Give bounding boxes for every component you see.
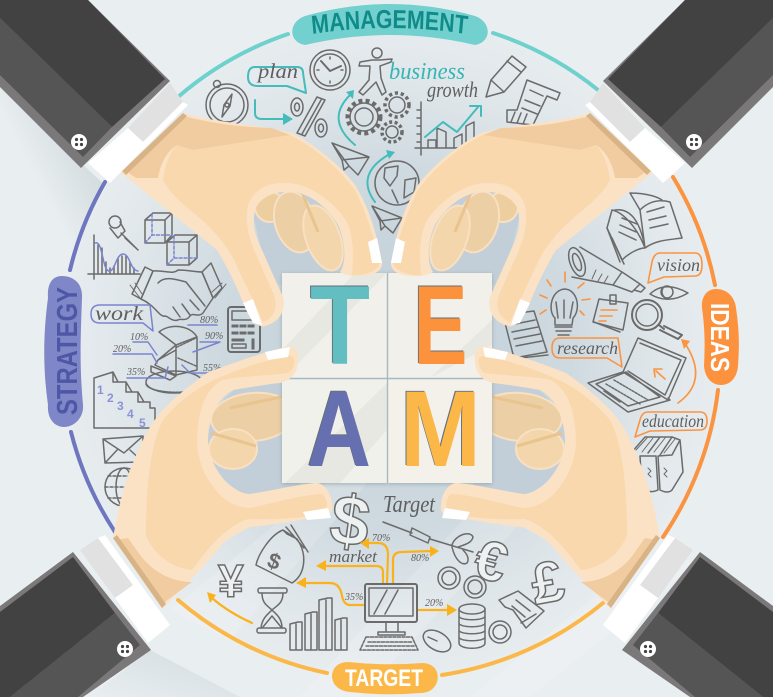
sleeve: top left: [0, 0, 188, 183]
icon: stairs: [94, 372, 155, 430]
letter: M: M: [400, 368, 481, 489]
icon: stairs: 2: [107, 391, 114, 405]
labels: target percentages: market: [329, 547, 378, 566]
hand: top left: [120, 113, 382, 326]
sleeve: top right: [585, 0, 773, 183]
tile: T: [282, 273, 387, 378]
icon: yen: ¥: [218, 555, 244, 607]
pill: management: [292, 4, 488, 45]
icon: pushpin: [109, 216, 138, 250]
text: business: business: [389, 59, 465, 85]
labels: target percentages: 35%: [344, 592, 363, 603]
icon: open book: [607, 193, 682, 264]
text: growth: growth: [427, 77, 478, 102]
arrow: laptop: [678, 339, 696, 403]
arc: ideas top: [673, 177, 715, 285]
icon: eye: [650, 286, 688, 299]
sleeve: bottom left: [0, 535, 170, 697]
pill: strategy: [44, 276, 84, 427]
arc: target left: [178, 600, 327, 673]
icon: note: [593, 295, 628, 332]
bubble: plan: plan: [256, 59, 298, 83]
arc: ideas bottom: [663, 390, 718, 537]
icon: light bulb: [540, 272, 590, 335]
bubble: work: [91, 303, 153, 331]
icon: globe grid: [105, 468, 143, 506]
icon: dart: [383, 522, 473, 564]
labels: target percentages: 70%: [372, 533, 390, 544]
icon: books: [632, 437, 683, 492]
labels: target percentages: 80%: [411, 553, 429, 564]
labels: target percentages: [329, 533, 443, 609]
icon: paper plane: [332, 143, 369, 175]
bubble: vision: vision: [657, 255, 700, 275]
bubble: work: work: [95, 303, 144, 325]
chart: 3d pie: [146, 326, 202, 393]
arc: management right: [493, 33, 598, 90]
callouts: pie percentages: 35%: [126, 367, 145, 378]
icon: money bag: [256, 525, 308, 583]
callouts: pie percentages: 10%: [130, 332, 148, 343]
card: team: [282, 273, 492, 483]
icon: magnifier: [632, 300, 682, 339]
label: management: MANAGEMENT: [312, 10, 468, 34]
label: strategy: STRATEGY: [52, 287, 84, 415]
icon: calculator: [228, 307, 260, 352]
icon: compass: [206, 80, 248, 126]
arrow: globe: [367, 150, 395, 202]
label: ideas: IDEAS: [705, 303, 735, 372]
icon: clock: [310, 50, 350, 90]
disk light streaks: [170, 480, 700, 697]
tile: M: [388, 379, 492, 483]
icons: ideas: [503, 193, 707, 492]
fingers behind card: top left: [253, 187, 352, 285]
bubble: plan: [248, 59, 306, 93]
arrow: plan: [255, 100, 293, 125]
icons: management: [206, 48, 560, 233]
icon: telescope: [565, 246, 645, 292]
tile: A: [282, 379, 387, 483]
icon: globe: [375, 161, 419, 205]
chart: growth: [415, 102, 481, 155]
divider lines: [282, 273, 492, 483]
icon: hourglass: [257, 588, 287, 633]
icon: mouse: [420, 626, 454, 656]
pill: target: [332, 662, 438, 694]
icon: percent: [291, 97, 327, 137]
hand: bottom right: [441, 346, 660, 608]
text: target: Target: [383, 492, 436, 518]
sleeve: bottom right: [603, 535, 773, 697]
label: target: TARGET: [345, 665, 423, 692]
sleeve cast shadow: bottom: [90, 650, 240, 697]
icon: envelope: [103, 436, 143, 463]
icons: strategy: [88, 213, 260, 506]
icon: paper plane small: [372, 206, 402, 233]
arrows: target: [207, 538, 457, 623]
chart: bars: [290, 598, 347, 650]
hand: top right: [391, 113, 653, 326]
icon: euro: €: [468, 526, 514, 595]
labels: target percentages: 20%: [425, 598, 443, 609]
callouts: pie percentages: [113, 315, 223, 378]
icon: gears: [348, 93, 409, 142]
callouts: pie percentages: 80%: [200, 315, 218, 326]
icon: stairs: 1: [97, 383, 104, 397]
icon: money bag: $: [264, 547, 284, 575]
bubble: research: [552, 338, 622, 367]
card diagonal shading: [282, 273, 492, 483]
callouts: pie percentages: 20%: [113, 344, 131, 355]
callouts: pie percentages: 90%: [205, 331, 223, 342]
bubble: education: [635, 411, 707, 437]
icon: receipt: [499, 591, 544, 628]
bubble: education: education: [642, 411, 704, 431]
icon: pencil: [486, 56, 526, 97]
hand: bottom left: [113, 346, 332, 608]
ring arcs: [70, 33, 718, 675]
icon: stairs: 5: [139, 416, 146, 430]
fingers behind card: bottom left: [207, 380, 300, 497]
icon: handshake: [130, 263, 226, 320]
icon: stairs: 4: [127, 407, 134, 421]
tile: E: [388, 273, 492, 378]
icon: dollar: $: [325, 479, 375, 562]
letter: E: E: [414, 263, 468, 388]
icon: scroll: [507, 80, 560, 125]
icon: stairs: 3: [117, 399, 124, 413]
icon: cubes: [145, 213, 197, 265]
arc: management left: [178, 34, 288, 97]
bubble: vision: [648, 253, 702, 283]
arrow: gears: [339, 90, 355, 145]
fingers behind card: top right: [421, 187, 520, 285]
letter: T: T: [310, 263, 370, 388]
arc: target right: [442, 603, 603, 675]
callouts: pie percentages: 55%: [203, 363, 221, 374]
icon: pound: £: [526, 548, 569, 618]
icon: notebook: [503, 311, 548, 358]
pill: ideas: [702, 289, 739, 385]
icon: laptop: [588, 338, 686, 412]
sleeve cast shadow: left: [0, 87, 110, 300]
letter: A: A: [307, 368, 371, 489]
icon: coins: [438, 567, 511, 648]
icon: runner: [359, 48, 392, 95]
fingers behind card: bottom right: [473, 380, 566, 497]
arc: strategy bottom: [71, 432, 115, 532]
icon: monitor: [360, 584, 418, 650]
bubble: research: research: [557, 338, 618, 358]
arc: strategy top: [70, 182, 105, 270]
chart: curves: [88, 235, 140, 279]
icons: target: [207, 479, 569, 656]
